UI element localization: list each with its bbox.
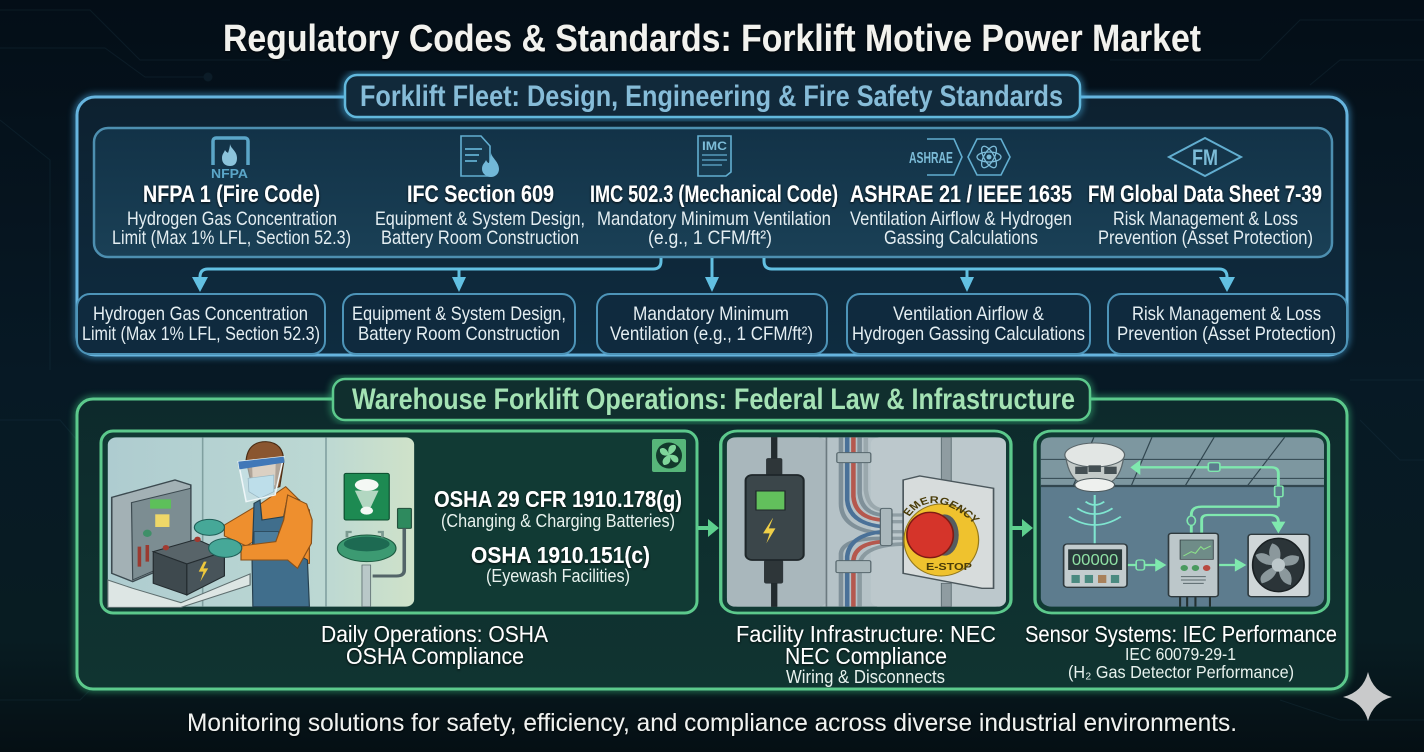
text: OSHA battery rule <box>434 486 682 531</box>
box: minimum ventilation <box>597 294 827 354</box>
box: minimum ventilation: Mandatory Minimum <box>633 303 789 325</box>
arrow: infrastructure to sensors <box>1012 519 1033 537</box>
standard: NFPA 1 <box>112 181 351 249</box>
panel: sensor systems: 00000 <box>1072 551 1118 569</box>
text: OSHA eyewash rule: (Eyewash Facilities) <box>486 565 630 586</box>
label: facility infrastructure: Wiring & Disconnects <box>786 666 945 687</box>
standard: NFPA 1: Hydrogen Gas Concentration <box>127 208 337 230</box>
panel: facility infrastructure NEC: E-STOP <box>926 562 972 573</box>
standard: IMC 502.3 <box>590 181 838 249</box>
box: hydrogen limit: Hydrogen Gas Concentration <box>93 303 308 325</box>
illustration: worker charging battery with eyewash station <box>108 437 414 607</box>
box: airflow calculations <box>847 294 1090 354</box>
label: daily operations: OSHA Compliance <box>346 643 524 669</box>
box: hydrogen limit <box>77 294 325 354</box>
standard: ASHRAE 21 <box>850 181 1072 249</box>
label: sensor systems: (H₂ Gas Detector Performance) <box>1068 662 1294 682</box>
icon: ventilation fan <box>652 439 686 472</box>
text: OSHA eyewash rule: OSHA 1910.151(c) <box>471 542 650 568</box>
heading: fleet standards <box>345 75 1080 117</box>
standard: IMC 502.3: Mandatory Minimum Ventilation <box>597 208 831 230</box>
icon: sparkle watermark <box>1343 672 1392 721</box>
panel: facility infrastructure NEC: EMERGENCY <box>902 496 980 522</box>
icon: ASHRAE and atom hexagons <box>909 139 1010 175</box>
standard: FM Global: FM Global Data Sheet 7-39 <box>1088 181 1322 208</box>
standard: IMC 502.3: (e.g., 1 CFM/ft²) <box>648 227 772 249</box>
standard: NFPA 1: Limit (Max 1% LFL, Section 52.3) <box>112 227 351 249</box>
box: airflow calculations: Ventilation Airflow & <box>893 303 1044 325</box>
label: sensor systems: Sensor Systems: IEC Performance <box>1025 621 1337 647</box>
icon: NFPA <box>211 138 249 181</box>
footer tagline: Monitoring solutions for safety, efficiency, and compliance across diverse industrial environments. <box>187 709 1237 737</box>
panel: sensor systems <box>1035 431 1329 613</box>
text: OSHA battery rule: (Changing & Charging Batteries) <box>441 510 675 531</box>
title: Regulatory Codes & Standards: Forklift Motive Power Market <box>223 18 1201 60</box>
standard: IFC 609: Equipment & System Design, <box>375 208 585 230</box>
standard: NFPA 1: NFPA 1 (Fire Code) <box>143 181 320 208</box>
box: risk management: Risk Management & Loss <box>1132 303 1321 325</box>
standard: IFC 609: Battery Room Construction <box>381 227 579 249</box>
standard: IFC 609 <box>375 181 585 249</box>
standard: ASHRAE 21: Ventilation Airflow & Hydrogen <box>850 208 1072 230</box>
icon: FM diamond: FM <box>1192 145 1218 170</box>
box: minimum ventilation: Ventilation (e.g., 1 CFM/ft²) <box>610 323 813 345</box>
label: daily operations: Daily Operations: OSHA <box>321 621 548 647</box>
panel: daily operations OSHA <box>101 431 697 613</box>
label: sensor systems: IEC 60079-29-1 <box>1125 644 1236 664</box>
label: daily operations <box>321 621 548 669</box>
icon: NFPA: NFPA <box>211 166 249 181</box>
box: equipment design: Battery Room Construction <box>358 323 560 345</box>
text: OSHA battery rule: OSHA 29 CFR 1910.178(g) <box>434 486 682 512</box>
standard: IFC 609: IFC Section 609 <box>407 181 554 208</box>
panel: forklift fleet standards <box>77 75 1347 355</box>
box: equipment design: Equipment & System Design, <box>352 303 566 325</box>
arrows: standards to requirements <box>192 258 1235 292</box>
heading: fleet standards: Forklift Fleet: Design, Engineering & Fire Safety Standards <box>360 80 1063 113</box>
standard: FM Global: Risk Management & Loss <box>1113 208 1298 230</box>
standard: FM Global: Prevention (Asset Protection) <box>1098 227 1313 249</box>
panel: facility infrastructure NEC <box>719 430 1013 614</box>
standard: ASHRAE 21: ASHRAE 21 / IEEE 1635 <box>850 181 1072 208</box>
box: equipment design <box>343 294 575 354</box>
label: facility infrastructure <box>736 621 996 687</box>
icon: IMC document: IMC <box>702 139 727 153</box>
panel: warehouse operations <box>70 374 1354 696</box>
label: facility infrastructure: NEC Compliance <box>785 643 947 669</box>
panel: standards row <box>94 128 1332 257</box>
label: facility infrastructure: Facility Infrastructure: NEC <box>736 621 996 647</box>
text: OSHA eyewash rule <box>471 542 650 586</box>
label: sensor systems <box>1025 621 1337 682</box>
standard: ASHRAE 21: Gassing Calculations <box>884 227 1038 249</box>
box: airflow calculations: Hydrogen Gassing Calculations <box>852 323 1085 345</box>
box: hydrogen limit: Limit (Max 1% LFL, Section 52.3) <box>82 323 320 345</box>
box: risk management <box>1108 294 1347 354</box>
icon: ASHRAE and atom hexagons: ASHRAE <box>909 150 953 167</box>
box: risk management: Prevention (Asset Protection) <box>1117 323 1336 345</box>
heading: warehouse operations: Warehouse Forklift Operations: Federal Law & Infrastructure <box>352 383 1075 416</box>
icon: IMC document <box>698 136 731 176</box>
standard: FM Global <box>1088 181 1322 249</box>
arrow: operations to infrastructure <box>698 519 719 537</box>
standard: IMC 502.3: IMC 502.3 (Mechanical Code) <box>590 181 838 208</box>
icon: IFC document <box>461 136 499 177</box>
icon: FM diamond <box>1169 138 1241 176</box>
